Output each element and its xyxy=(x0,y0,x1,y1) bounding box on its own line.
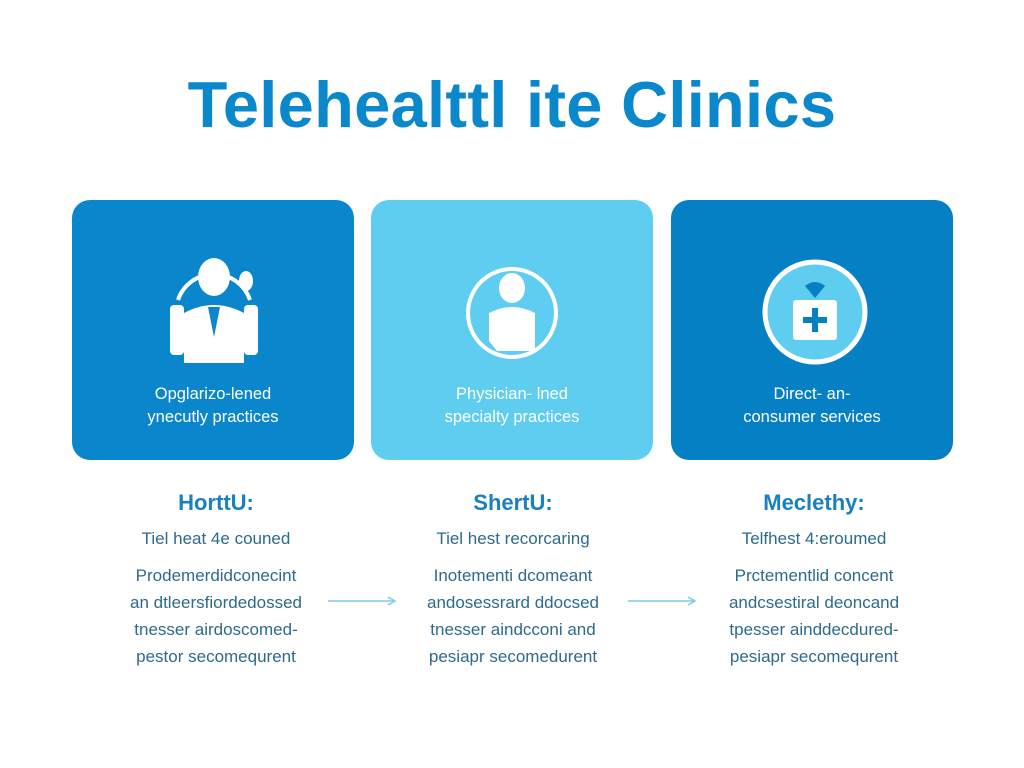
label: Opglarizo-lened xyxy=(155,385,271,403)
body: pesiapr secomequrent xyxy=(730,647,898,666)
panel: organization-led xyxy=(72,200,354,460)
heading: ShertU: xyxy=(473,490,553,515)
icon: doctor with headset xyxy=(170,258,258,363)
body: tnesser aindcconi and xyxy=(430,620,596,639)
column 2 text xyxy=(427,490,599,666)
label: Direct- an- xyxy=(773,385,850,403)
body xyxy=(729,566,899,666)
label: consumer services xyxy=(743,408,881,426)
label: Physician- lned xyxy=(456,385,568,403)
body xyxy=(427,566,599,666)
heading: HorttU: xyxy=(178,490,254,515)
arrow 2 xyxy=(628,596,696,606)
heading: Meclethy: xyxy=(763,490,865,515)
body: andcsestiral deoncand xyxy=(729,593,899,612)
body: Prodemerdidconecint xyxy=(136,566,296,585)
body xyxy=(130,566,302,666)
label: ynecutly practices xyxy=(147,408,279,426)
column 3 text xyxy=(729,490,899,666)
icon: medical kit in circle xyxy=(762,260,868,364)
body: pestor secomequrent xyxy=(136,647,296,666)
body: tnesser airdoscomed- xyxy=(134,620,298,639)
panel: direct-to-consumer xyxy=(671,200,953,460)
label xyxy=(147,385,279,426)
label: specialty practices xyxy=(445,408,579,426)
title: Telehealttl ite Clinics xyxy=(188,68,836,141)
column 1 text xyxy=(130,490,302,666)
body: tpesser ainddecdured- xyxy=(729,620,899,639)
body: andosessrard ddocsed xyxy=(427,593,599,612)
body: an dtleersfiordedossed xyxy=(130,593,302,612)
label xyxy=(743,385,881,426)
body: Prctementlid concent xyxy=(735,566,893,585)
body: Inotementi dcomeant xyxy=(434,566,592,585)
subheading: Tiel heat 4e couned xyxy=(142,529,290,548)
body: pesiapr secomedurent xyxy=(429,647,597,666)
arrow 1 xyxy=(328,596,396,606)
panel: physician-led xyxy=(371,200,653,460)
subheading: Tiel hest recorcaring xyxy=(436,529,590,548)
label xyxy=(445,385,579,426)
subheading: Telfhest 4:eroumed xyxy=(742,529,886,548)
icon: physician in circle xyxy=(466,267,558,359)
